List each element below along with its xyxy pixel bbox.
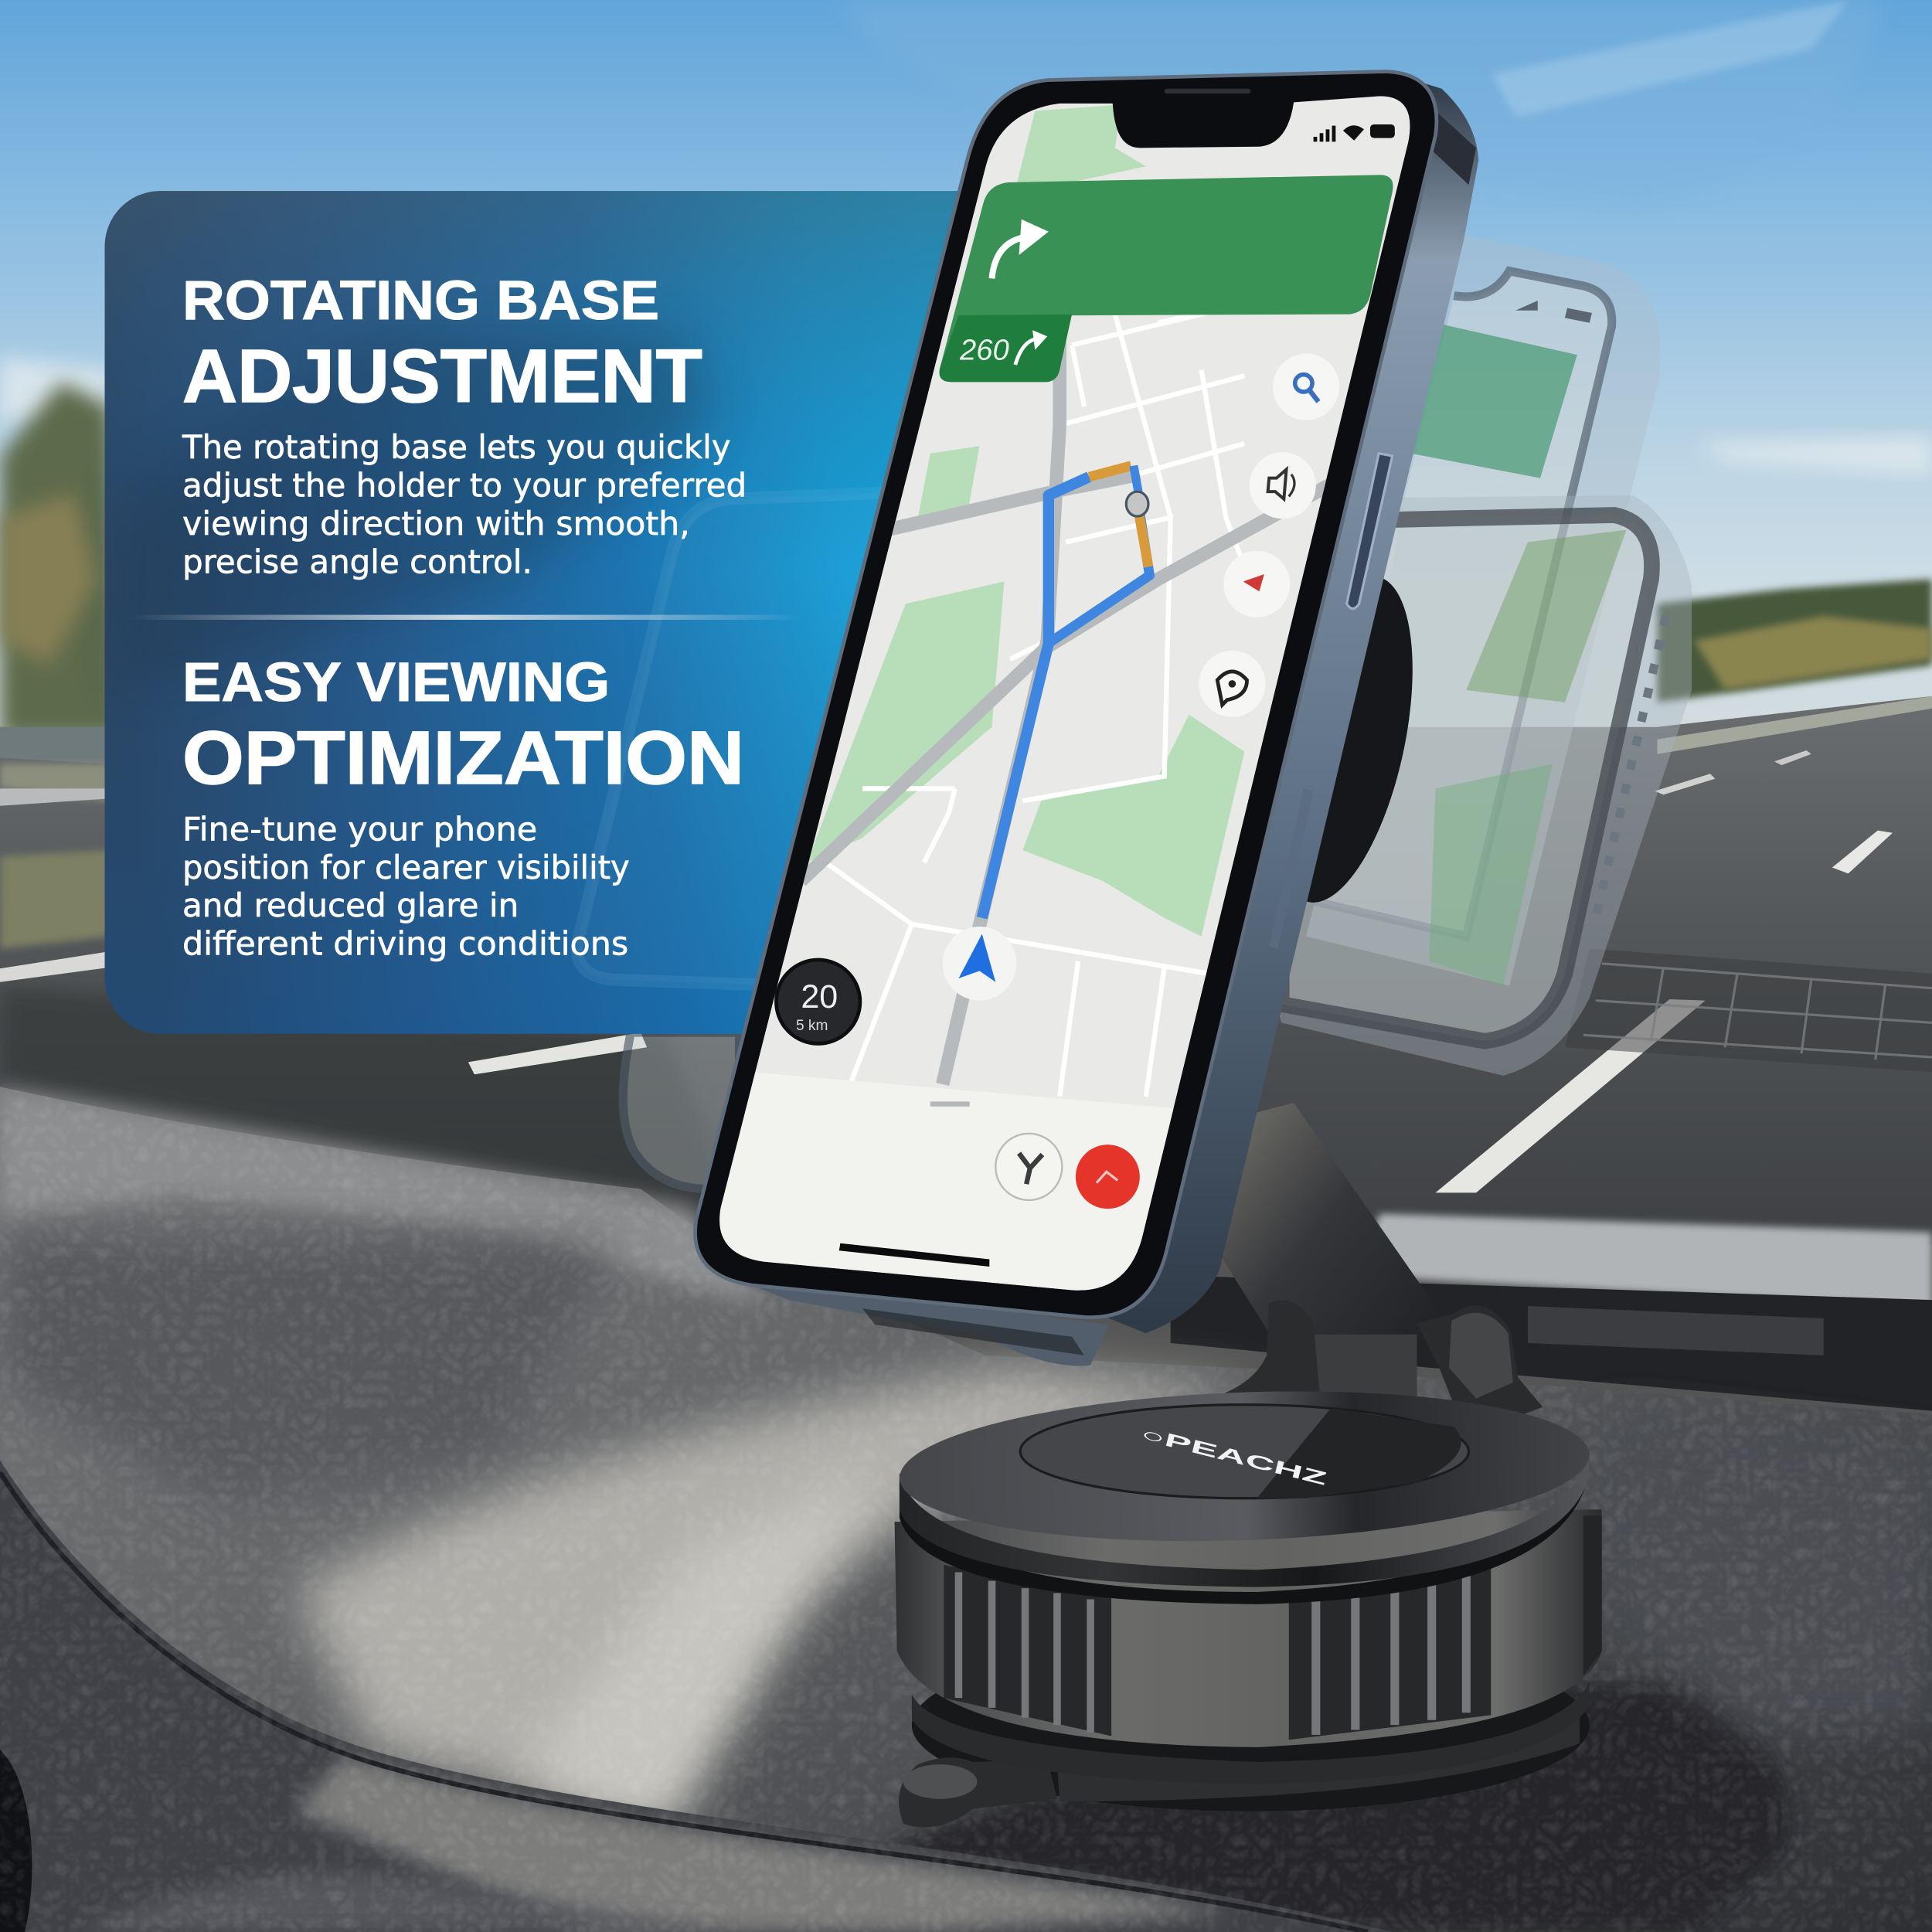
body: easy viewing description: position for clearer visibility xyxy=(182,849,630,886)
ghost status icons xyxy=(1515,301,1592,323)
ghost phone: upper right rotated position xyxy=(1306,232,1660,986)
notch speaker xyxy=(1165,89,1250,94)
body: easy viewing description: different driving conditions xyxy=(182,926,628,963)
text block: easy viewing xyxy=(182,651,744,963)
phone bottom edge xyxy=(727,1275,1109,1366)
treeline right xyxy=(1657,579,1932,702)
foot ring xyxy=(912,1639,1590,1811)
body: easy viewing description xyxy=(182,811,630,963)
navigation arrow xyxy=(943,927,1016,1001)
crossbar xyxy=(1314,1335,1417,1407)
body: rotating base description: The rotating base lets you quickly xyxy=(182,429,730,466)
right post xyxy=(1417,1305,1543,1435)
distance label: 260 xyxy=(959,334,1009,367)
phone metal side xyxy=(1109,71,1478,1333)
leather grain xyxy=(0,1084,1932,1932)
heading: optimization: OPTIMIZATION xyxy=(182,716,744,800)
lid lip xyxy=(900,1447,1590,1604)
speed badge: 20 xyxy=(801,978,838,1015)
bottom sheet xyxy=(719,1073,1173,1291)
magnetic disc behind phone xyxy=(1248,564,1438,915)
knurled ring xyxy=(895,1509,1602,1747)
button: compass xyxy=(1223,551,1290,617)
sunlight patches xyxy=(0,1089,764,1306)
button: sound xyxy=(1250,452,1316,519)
button: red alert xyxy=(1076,1145,1140,1209)
divider xyxy=(129,615,801,620)
button: route fork xyxy=(995,1134,1062,1200)
lid top xyxy=(897,1380,1592,1553)
body: rotating base description: adjust the holder to your preferred xyxy=(182,468,747,505)
map: minor roads xyxy=(827,315,1245,1097)
phone screen xyxy=(719,96,1410,1291)
knurl highlights left xyxy=(958,1572,1090,1733)
release tab xyxy=(899,1757,1057,1828)
status icons xyxy=(1314,124,1395,141)
body: rotating base description xyxy=(182,429,747,580)
body: rotating base description: viewing direction with smooth, xyxy=(182,505,690,543)
speed badge: 5 km xyxy=(796,1018,828,1034)
dark wipers xyxy=(1171,1275,1932,1411)
dashboard top reflection strip xyxy=(1355,1213,1932,1308)
knurl highlights right xyxy=(1316,1575,1466,1735)
heading: adjustment: ADJUSTMENT xyxy=(182,334,702,418)
brand logo: ○PEACHZ xyxy=(1138,1423,1329,1490)
arm xyxy=(1213,1103,1441,1393)
stitched seam and lower panel xyxy=(0,1460,1393,1932)
dashboard xyxy=(0,1087,1932,1932)
home bar xyxy=(839,1243,989,1267)
turn arrow icon xyxy=(992,236,1029,278)
sheet handle xyxy=(930,1101,970,1107)
left post xyxy=(1185,1300,1321,1407)
body: rotating base description: precise angle control. xyxy=(182,543,532,580)
base mount xyxy=(895,1380,1602,1828)
phone bezel xyxy=(696,71,1437,1318)
map: main grey roads xyxy=(801,321,1331,1084)
button: search xyxy=(1273,354,1339,420)
main phone xyxy=(690,71,1478,1366)
map: waypoint xyxy=(1126,492,1148,516)
map: route xyxy=(982,466,1150,918)
mount arm and hinge xyxy=(1185,1103,1543,1435)
button: location xyxy=(1199,651,1265,717)
barrier reflections xyxy=(1565,949,1932,1072)
ghost phone: left rotated position xyxy=(623,1032,740,1189)
text block: rotating base xyxy=(182,270,747,580)
map: green areas xyxy=(807,105,1244,937)
panel: text background xyxy=(105,191,1041,1034)
knurl band left xyxy=(944,1565,1111,1736)
side button xyxy=(1347,454,1393,609)
body: easy viewing description: and reduced glare in xyxy=(182,887,519,924)
knurl band right xyxy=(1289,1567,1491,1740)
ghost phone: lower right rotated position xyxy=(1257,495,1692,1076)
body: easy viewing description: Fine-tune your phone xyxy=(182,811,537,848)
speed badge xyxy=(776,960,860,1043)
faint tree shadow inside panel xyxy=(123,332,715,690)
road surface xyxy=(0,696,1932,1244)
heading: easy viewing: EASY VIEWING xyxy=(182,651,610,713)
treeline left xyxy=(0,382,123,740)
heading: rotating base: ROTATING BASE xyxy=(182,270,659,332)
faint ghost phone inside panel xyxy=(577,493,887,986)
sky xyxy=(0,0,1932,740)
rotating disc xyxy=(1020,1405,1469,1498)
lower right shadow xyxy=(887,1682,1791,1932)
green direction banner xyxy=(940,175,1393,382)
lane markings xyxy=(0,951,111,982)
lower ring xyxy=(912,1682,1590,1784)
